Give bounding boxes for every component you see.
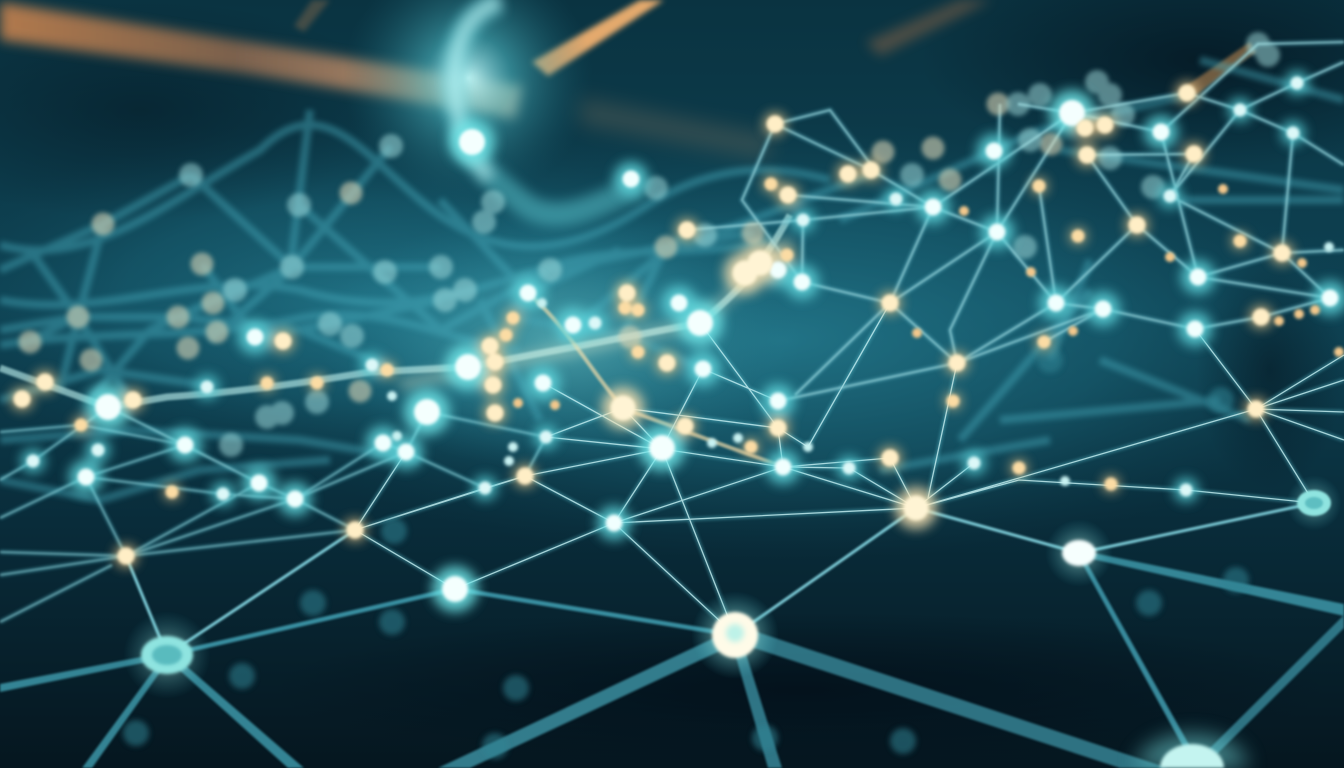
glowing cool nodes (33, 83, 1330, 589)
large ringed hub nodes (123, 475, 1342, 768)
bright central ribbon (0, 215, 790, 467)
glowing warm nodes (22, 93, 1339, 556)
blurred background network (0, 60, 1344, 500)
node glow halos (22, 83, 1330, 589)
thick foreground links (0, 503, 1344, 768)
cyan light arc (343, 0, 640, 214)
orange light streaks (0, 0, 1256, 160)
foreground links with glow (0, 42, 1344, 635)
